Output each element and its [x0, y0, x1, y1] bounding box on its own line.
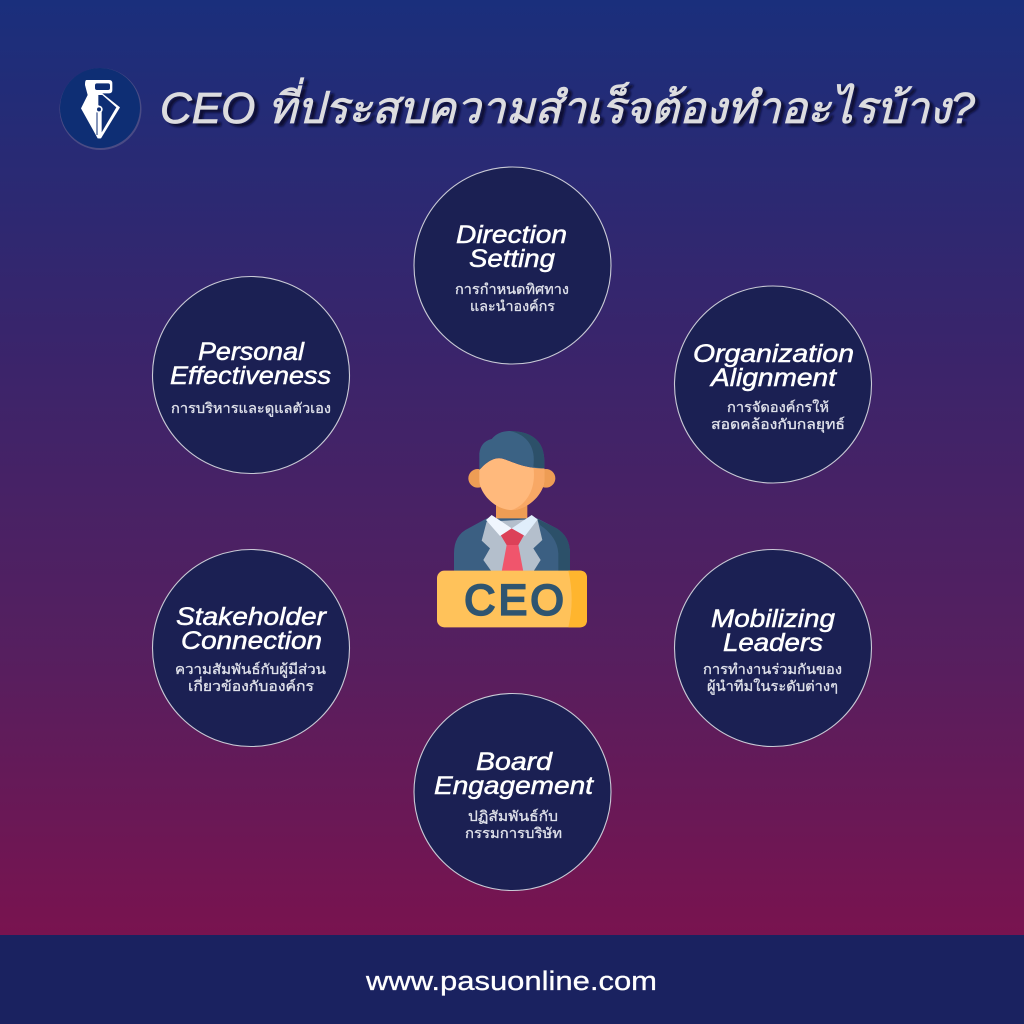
panel: Board Engagement: Engagement — [434, 772, 594, 800]
logo: pen nib badge — [60, 68, 142, 150]
panel: Stakeholder Connection — [152, 550, 350, 746]
panel: Personal Effectiveness — [152, 276, 350, 474]
panel: Organization Alignment: สอดคล้องกับกลยุทธ์ — [711, 416, 845, 433]
CEO label: CEO — [464, 577, 564, 625]
panel: Direction Setting: การกำหนดทิศทาง — [455, 281, 569, 297]
panel: Direction Setting: Direction — [456, 221, 567, 249]
panel: Organization Alignment: การจัดองค์กรให้ — [727, 399, 829, 415]
panel: Organization Alignment — [674, 286, 872, 483]
panel: Stakeholder Connection: เกี่ยวข้องกับองค์กร — [188, 677, 315, 694]
panel: Direction Setting — [414, 167, 611, 364]
panel: Mobilizing Leaders: Leaders — [723, 629, 823, 657]
panel: Mobilizing Leaders — [674, 550, 872, 746]
panel: Board Engagement: ปฏิสัมพันธ์กับ — [468, 808, 558, 824]
panel: Board Engagement: กรรมการบริษัท — [465, 825, 562, 841]
title: CEO ที่ประสบความสำเร็จต้องทำอะไรบ้าง? — [160, 77, 976, 133]
panel: Board Engagement — [414, 694, 611, 890]
icon: CEO figure — [437, 431, 587, 627]
footer bar — [0, 935, 1024, 1024]
panel: Personal Effectiveness: Personal — [198, 338, 306, 366]
panel: Organization Alignment: Organization — [693, 340, 854, 368]
title: CEO ที่ประสบความสำเร็จต้องทำอะไรบ้าง? — [164, 80, 980, 136]
name plate — [437, 571, 587, 627]
panel: Personal Effectiveness: การบริหารและดูแลตัวเอง — [171, 400, 331, 417]
panel: Stakeholder Connection: ความสัมพันธ์กับผู้มีส่วน — [175, 661, 326, 678]
panel: Stakeholder Connection: Stakeholder — [176, 603, 328, 631]
panel: Personal Effectiveness: Effectiveness — [170, 362, 331, 390]
panel: Board Engagement: Board — [476, 748, 553, 776]
panel: Mobilizing Leaders: ผู้นำทีมในระดับต่างๆ — [707, 678, 838, 695]
panel: Stakeholder Connection: Connection — [181, 627, 322, 655]
panel: Organization Alignment: Alignment — [709, 364, 837, 392]
panel: Direction Setting: และนำองค์กร — [470, 298, 555, 314]
panel: Mobilizing Leaders: Mobilizing — [711, 605, 835, 633]
panel: Direction Setting: Setting — [469, 245, 555, 273]
website url: www.pasuonline.com — [365, 966, 657, 996]
panel: Mobilizing Leaders: การทำงานร่วมกันของ — [703, 661, 842, 677]
